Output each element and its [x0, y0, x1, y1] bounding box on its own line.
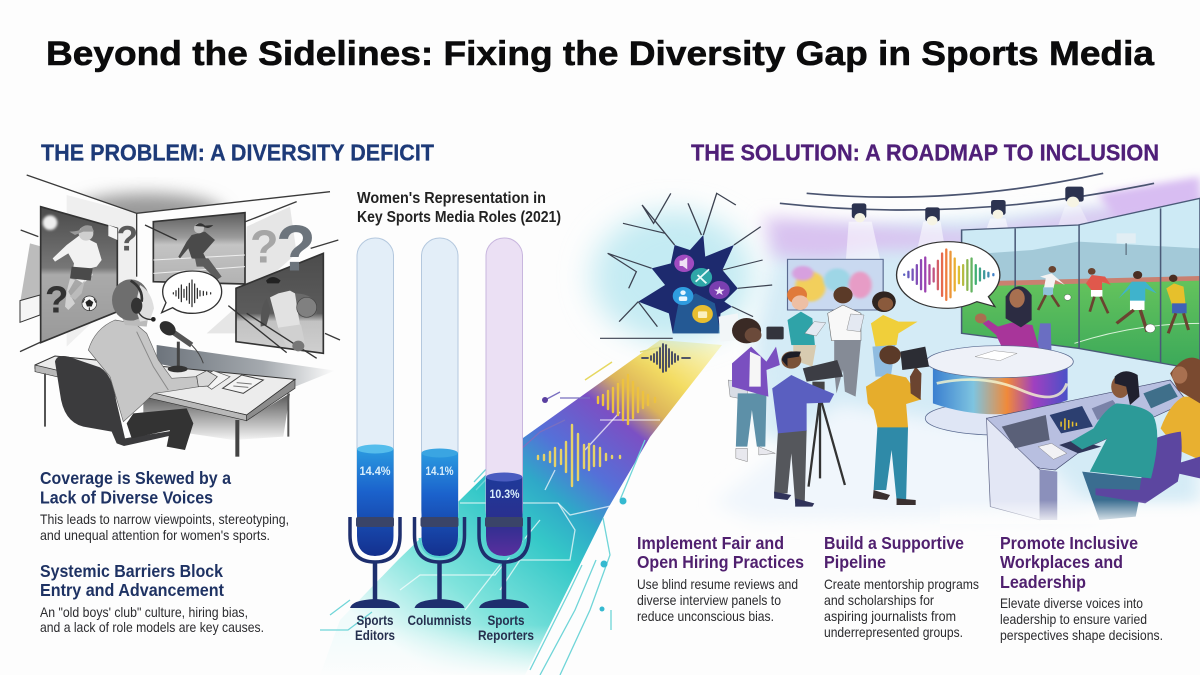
- text block: coverage skewed: Lack of Diverse Voices: [40, 488, 213, 508]
- chart title: [357, 190, 561, 226]
- text block: supportive pipeline: Pipeline: [824, 552, 886, 572]
- title: Beyond the Sidelines: Fixing the Diversity Gap in Sports Media: [46, 35, 1155, 73]
- text block: inclusive workplaces: Workplaces and: [1000, 552, 1123, 572]
- screen: running player: [145, 213, 245, 284]
- text block: systemic barriers: Systemic Barriers Block: [40, 561, 223, 581]
- colleague: teal top: [787, 286, 826, 367]
- illustration: studio: [592, 173, 1200, 520]
- woman with camera: [728, 318, 784, 462]
- text block: fair hiring: diverse interview panels to: [637, 592, 781, 608]
- screen: soccer player: [41, 207, 117, 343]
- stadium window: [962, 198, 1200, 370]
- text block: fair hiring: [637, 533, 804, 624]
- chart: microphone tube bars: [350, 238, 529, 608]
- bar: sports reporters 10.3%: 10.3%: [490, 489, 520, 501]
- bar: columnists 14.1%: [414, 238, 464, 608]
- bar: columnists 14.1%: 14.1%: [426, 466, 454, 478]
- waveforms on path: [538, 344, 690, 486]
- text block: inclusive workplaces: leadership to ensure varied: [1000, 611, 1147, 627]
- text block: supportive pipeline: and scholarships for: [824, 592, 934, 608]
- text block: supportive pipeline: underrepresented groups.: [824, 624, 963, 640]
- bar: sports editors 14.4%: 14.4%: [360, 466, 390, 478]
- cracked wall opening: [592, 193, 772, 343]
- operator: woman in yellow: [1161, 358, 1200, 478]
- icon: circuit nodes: [600, 498, 626, 612]
- text block: inclusive workplaces: [1000, 533, 1163, 643]
- text block: supportive pipeline: [824, 533, 979, 640]
- text block: coverage skewed: and unequal attention for women's sports.: [40, 527, 270, 543]
- screen: basketball player: [228, 253, 323, 358]
- control console: [986, 380, 1187, 520]
- illustration: roadmap path: [310, 340, 722, 675]
- news desk: [925, 346, 1073, 435]
- microphone: [157, 318, 203, 372]
- text block: systemic barriers: and a lack of role models are key causes.: [40, 619, 264, 635]
- chart axis labels: Sports: [356, 612, 394, 628]
- man in yellow shirt: [866, 346, 929, 505]
- icon circles: ★: [713, 284, 726, 298]
- text block: inclusive workplaces: Leadership: [1000, 572, 1086, 592]
- chart axis labels: Editors: [355, 627, 395, 643]
- colleague: yellow top: [871, 291, 918, 377]
- text block: fair hiring: Implement Fair and: [637, 533, 784, 553]
- icon circles: [673, 255, 730, 323]
- news anchor: [975, 286, 1052, 355]
- section heading: problem: THE PROBLEM: A DIVERSITY DEFICIT: [41, 140, 434, 166]
- text block: fair hiring: Use blind resume reviews and: [637, 576, 798, 592]
- back display screen: [787, 259, 883, 310]
- text block: supportive pipeline: Build a Supportive: [824, 533, 964, 553]
- chart axis labels: Sports: [488, 612, 525, 628]
- studio walls: [753, 177, 1200, 503]
- chart axis labels: Columnists: [408, 612, 472, 628]
- text block: coverage skewed: [40, 468, 289, 543]
- text block: systemic barriers: Entry and Advancement: [40, 580, 224, 600]
- floor fade under studio: [940, 500, 1200, 524]
- commentator: [88, 279, 217, 450]
- text block: supportive pipeline: Create mentorship programs: [824, 576, 979, 592]
- bar: sports reporters 10.3%: [479, 238, 529, 608]
- text block: coverage skewed: Coverage is Skewed by a: [40, 468, 231, 488]
- text block: supportive pipeline: aspiring journalists from: [824, 608, 956, 624]
- desk rail shadow: [157, 345, 335, 390]
- group of colleagues: [787, 286, 918, 397]
- icon: question marks: ?: [250, 221, 278, 273]
- chart axis labels: Reporters: [478, 627, 534, 643]
- section heading: solution: THE SOLUTION: A ROADMAP TO INCLUSION: [691, 140, 1159, 166]
- chart axis labels: [355, 612, 534, 643]
- icon: question marks: ?: [117, 220, 138, 259]
- desk: [35, 356, 295, 457]
- text block: inclusive workplaces: perspectives shape decisions.: [1000, 627, 1163, 643]
- text block: fair hiring: reduce unconscious bias.: [637, 608, 774, 624]
- soccer players: [1038, 266, 1189, 333]
- bar: sports editors 14.4%: [350, 238, 400, 608]
- text block: systemic barriers: An "old boys' club" culture, hiring bias,: [40, 604, 248, 620]
- lighting rig: [780, 173, 1154, 273]
- chart title: Women's Representation in: [357, 190, 546, 207]
- text block: coverage skewed: This leads to narrow viewpoints, stereotyping,: [40, 511, 289, 527]
- text block: systemic barriers: [40, 561, 264, 635]
- console operators: [1071, 358, 1200, 520]
- icon: question marks: ?: [45, 279, 68, 322]
- chair: [55, 356, 173, 446]
- text block: inclusive workplaces: Elevate diverse voices into: [1000, 595, 1143, 611]
- icon: question marks: ?: [276, 212, 316, 285]
- icon: question marks: [45, 212, 316, 322]
- text block: inclusive workplaces: Promote Inclusive: [1000, 533, 1138, 553]
- cameraman: [772, 351, 845, 507]
- speech bubble with waveform: [162, 271, 222, 313]
- chart title: Key Sports Media Roles (2021): [357, 209, 561, 226]
- anchor speech bubble: [897, 242, 1000, 308]
- text block: fair hiring: Open Hiring Practices: [637, 552, 804, 572]
- colleague: white shirt: [828, 287, 864, 397]
- illustration: commentator booth: [20, 175, 340, 457]
